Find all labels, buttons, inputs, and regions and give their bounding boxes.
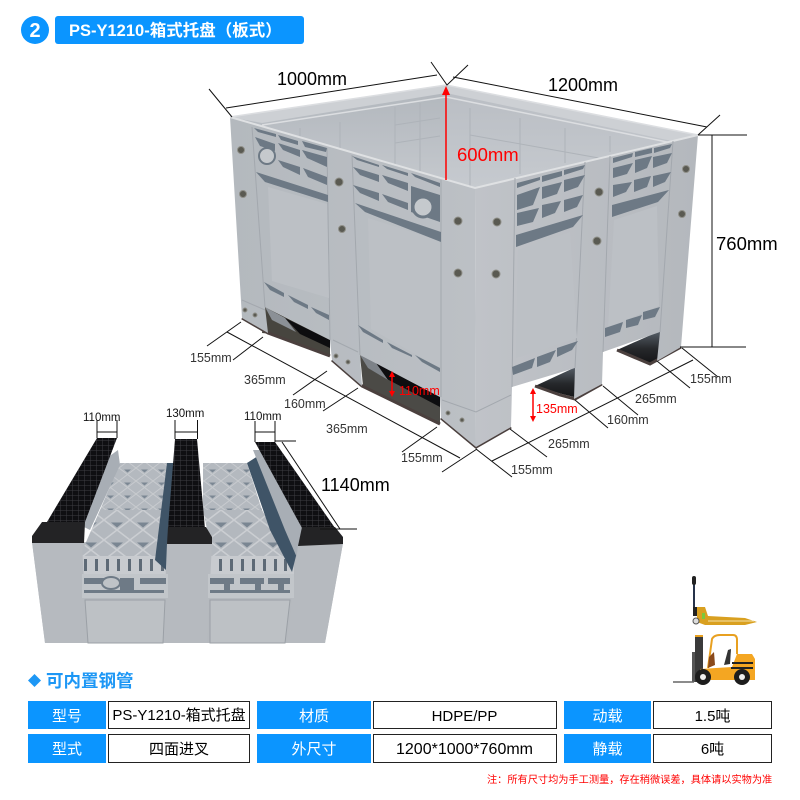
row 2: 四面进叉 [149, 741, 209, 758]
interior wall panel marks [300, 103, 610, 187]
row 2: 外尺寸 [291, 741, 337, 758]
red arrow: fork height 135 [530, 388, 536, 422]
pillars [32, 542, 343, 643]
dimension lines: main box [207, 62, 747, 477]
number badge [21, 16, 49, 44]
lattice floor right [203, 463, 262, 510]
bolts [238, 146, 690, 422]
labels: runner widths: 110mm [244, 411, 282, 423]
small dimension labels [190, 351, 732, 477]
body [32, 542, 343, 643]
inner wall of left and right runner [70, 450, 302, 560]
footnote: 注：所有尺寸均为手工测量，存在稍微误差，具体请以实物为准 [487, 773, 772, 786]
round ports on left panels [259, 148, 433, 217]
dimension label: interior 600mm: 600mm [457, 144, 519, 165]
interior wall left [230, 85, 446, 182]
icon: forklift [673, 635, 755, 685]
dimension lines: bottom view [97, 420, 357, 529]
labels: runner widths: 110mm [83, 412, 120, 424]
icon: pallet jack [692, 576, 757, 625]
specification table [28, 701, 772, 763]
main product photo: pallet box [230, 85, 698, 447]
slot shadows and feet [242, 307, 681, 447]
small dimension labels: 155mm [690, 372, 732, 386]
title bar [55, 16, 304, 44]
number badge: 2 [29, 20, 41, 42]
black runner left [47, 438, 117, 522]
right face [475, 135, 698, 447]
rim [230, 117, 698, 188]
dimension label: length 1200mm: 1200mm [548, 75, 618, 95]
window band left [82, 574, 168, 598]
row 1: PS-Y1210-箱式托盘 [112, 706, 246, 724]
window slats: left panels [254, 128, 441, 372]
gills band [82, 556, 294, 574]
title bar: PS-Y1210-箱式托盘（板式） [69, 20, 282, 40]
small dimension labels: 365mm [326, 422, 368, 436]
window slats: right panels [512, 144, 672, 375]
row 1: 1.5吨 [695, 708, 730, 725]
row 2: 6吨 [701, 741, 724, 758]
black end caps [32, 522, 343, 546]
small dimension labels: 135mm [536, 402, 578, 416]
small dimension labels: 155mm [401, 451, 443, 465]
feature heading: 可内置钢管 [46, 671, 134, 691]
labels: runner widths [83, 408, 282, 424]
labels: runner widths: 130mm [166, 408, 204, 420]
interior wall right [446, 85, 698, 188]
row 2: 1200*1000*760mm [396, 741, 533, 758]
left face [230, 117, 476, 447]
bottom view photo: pallet runners [32, 438, 343, 643]
lattice floor left [100, 463, 167, 510]
small dimension labels: 265mm [548, 437, 590, 451]
row 1 [28, 701, 772, 729]
small dimension labels: 155mm [190, 351, 232, 365]
black runner right [255, 442, 335, 528]
small dimension labels: 265mm [635, 392, 677, 406]
light panel fields [268, 187, 659, 368]
row 2: 静载 [592, 741, 623, 758]
header: number badge and title bar [21, 16, 304, 44]
dimension label: height 760mm: 760mm [716, 233, 778, 254]
small dimension labels: 110mm [399, 384, 440, 398]
red arrow: interior height [442, 86, 450, 180]
row 2 [28, 734, 772, 763]
small dimension labels: 160mm [284, 397, 326, 411]
row 1: HDPE/PP [432, 708, 497, 725]
red arrow: fork height 110 [389, 371, 395, 397]
row 1: 型号 [52, 708, 82, 725]
small dimension labels: 160mm [607, 413, 649, 427]
dark side shadows [155, 456, 300, 572]
black runner middle [168, 439, 205, 528]
dimension label: width 1000mm: 1000mm [277, 69, 347, 89]
row 2: 型式 [52, 741, 82, 758]
small dimension labels: 155mm [511, 463, 553, 477]
window band right [208, 574, 294, 598]
row 1: 材质 [299, 708, 329, 725]
interior rim band [230, 85, 698, 180]
lower panels [85, 600, 290, 643]
pillar seams and inner panels [242, 127, 673, 412]
row 1: 动载 [592, 708, 623, 725]
small dimension labels: 365mm [244, 373, 286, 387]
label: runner length: 1140mm [321, 475, 390, 495]
